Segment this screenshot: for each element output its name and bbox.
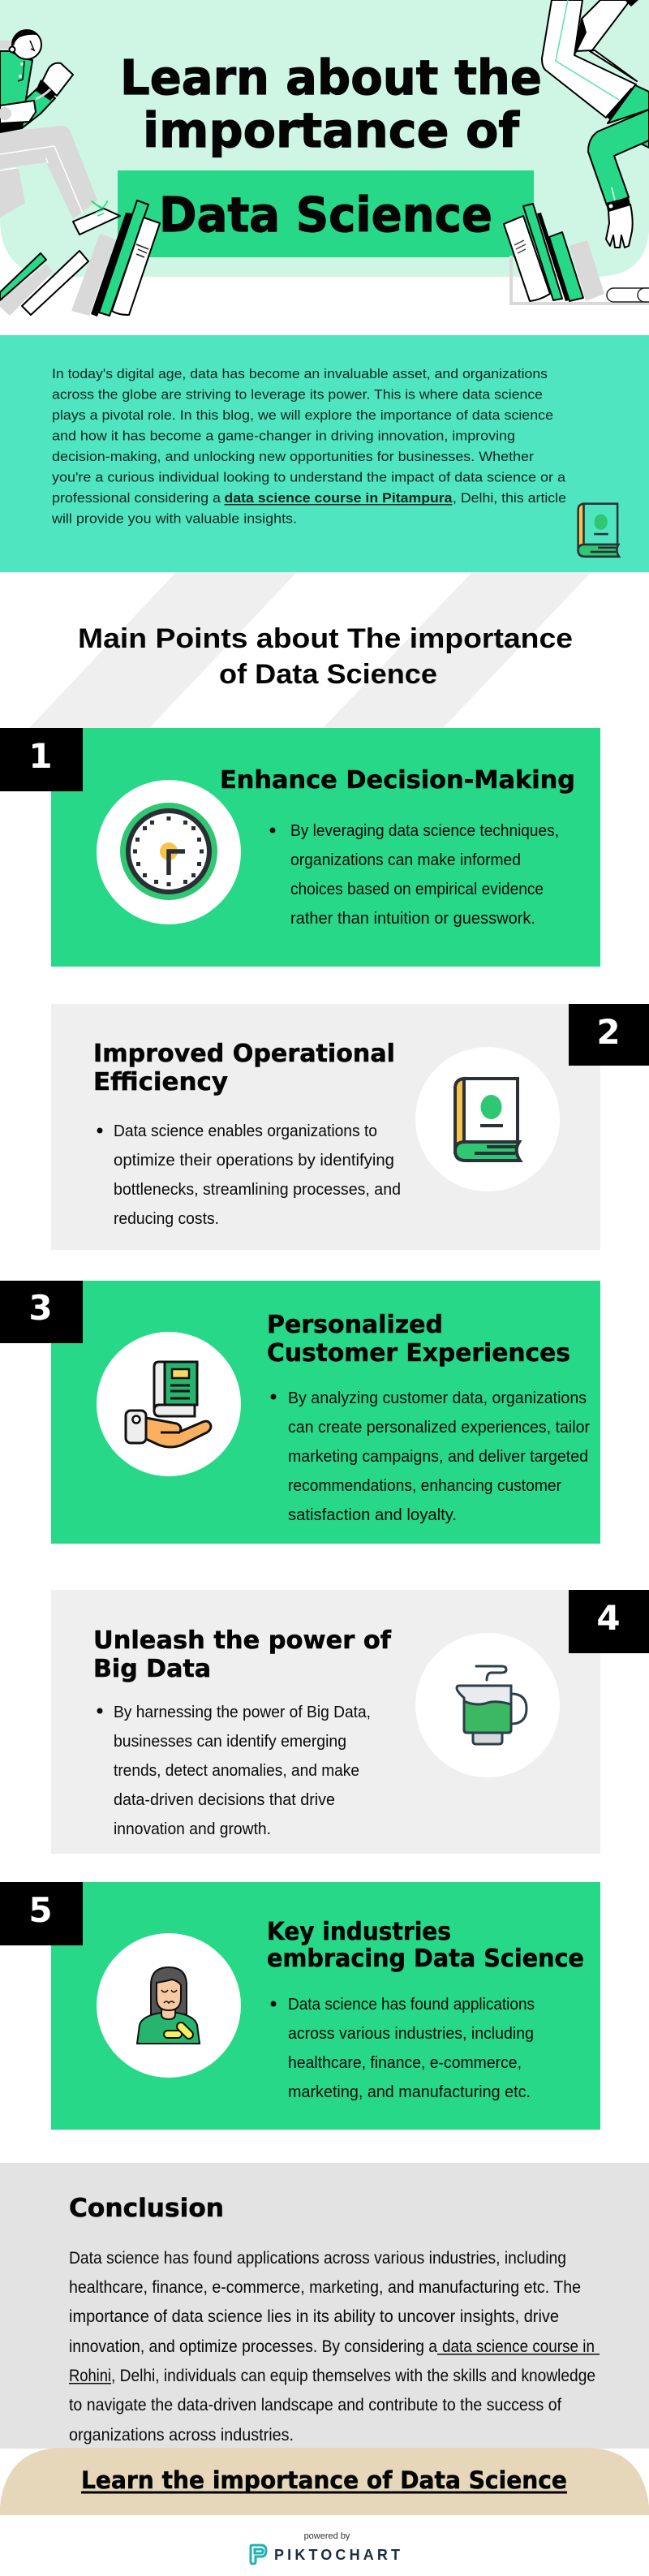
heading: main points: Main Points about The importance [78, 623, 573, 654]
icon: small book [578, 504, 619, 557]
text: point 5: healthcare, finance, e-commerce, [288, 2053, 522, 2072]
number badge 1 [0, 728, 83, 791]
text: point 1: organizations can make informed [290, 851, 521, 869]
call to action banner [0, 2448, 649, 2515]
text: point 3 [271, 1389, 590, 1524]
footer: powered by Piktochart: powered by [304, 2531, 350, 2541]
number badge 2: 2 [596, 1012, 621, 1052]
text block: introduction: In today's digital age, data has become an invaluable asset, and organizations [52, 366, 548, 381]
footer: powered by Piktochart: PIKTOCHART [274, 2547, 400, 2563]
text: point 4: data-driven decisions that drive [114, 1790, 335, 1809]
number badge 3 [0, 1281, 83, 1343]
text block: introduction: decision-making, and unlocking new opportunities for businesses. Whether [52, 449, 534, 464]
title highlight box [118, 170, 534, 257]
illustration: running person left [0, 30, 97, 219]
text block: introduction: data science course in Pitampura [224, 490, 453, 506]
illustration: falling books left [0, 200, 160, 317]
text: point 1: rather than intuition or guesswork. [290, 909, 535, 928]
text block: introduction: across the globe are striving to leverage its power. This is where data science [52, 386, 543, 403]
text: conclusion [69, 2249, 600, 2445]
number badge 4 [569, 1590, 649, 1653]
call to action banner: Learn the importance of Data Science [81, 2466, 567, 2494]
text: point 1: By leveraging data science techniques, [290, 821, 559, 840]
title: importance of [143, 102, 520, 158]
heading: point 5 [267, 1918, 584, 1973]
text: conclusion: , Delhi, individuals can equip themselves with the skills and knowledge [111, 2367, 595, 2385]
text: point 2: Data science enables organizations to [114, 1122, 377, 1140]
text block: introduction: and how it has become a game-changer in driving innovation, improving [52, 429, 515, 443]
panel: conclusion [0, 2163, 649, 2449]
number badge 1: 1 [28, 736, 53, 776]
text: point 1 [269, 821, 559, 928]
icon: Piktochart logo [251, 2545, 266, 2564]
text: point 4: businesses can identify emerging [114, 1732, 346, 1751]
heading: point 4: Unleash the power of [93, 1626, 392, 1655]
text: point 4 [97, 1703, 371, 1838]
text: point 5: Data science has found applications [288, 1995, 535, 2014]
text: conclusion: innovation, and optimize processes. By considering a [69, 2337, 437, 2356]
text: point 1: choices based on empirical evidence [290, 880, 544, 898]
title: Learn about the [120, 50, 542, 106]
number badge 4: 4 [596, 1598, 621, 1638]
footer: powered by Piktochart [251, 2531, 400, 2564]
icon: woman with pills [97, 1933, 241, 2078]
text: conclusion: data science course in [442, 2337, 595, 2356]
panel: point 5 [0, 1882, 600, 2130]
panel: point 1 [0, 728, 600, 967]
heading: main points [78, 623, 573, 690]
title [120, 50, 542, 243]
icon: hand holding book [97, 1332, 241, 1476]
heading: point 3: Personalized [267, 1311, 443, 1339]
heading: point 2: Efficiency [93, 1068, 228, 1096]
text block: introduction: will provide you with valuable insights. [51, 511, 297, 526]
panel: introduction [0, 335, 649, 572]
header panel [0, 0, 649, 317]
text: point 3: marketing campaigns, and deliver targeted [288, 1447, 588, 1466]
text: point 5: marketing, and manufacturing etc. [288, 2083, 531, 2101]
heading: point 1: Enhance Decision-Making [220, 766, 575, 795]
panel: point 2 [51, 1004, 649, 1250]
text: conclusion: Data science has found applications across various industries, including [69, 2249, 566, 2268]
panel: point 3 [0, 1281, 600, 1544]
text: conclusion: importance of data science lies in its ability to uncover insights, drive [69, 2307, 559, 2326]
heading: point 3 [267, 1311, 570, 1368]
heading: point 3: Customer Experiences [267, 1339, 570, 1368]
text: point 3: can create personalized experiences, tailor [288, 1418, 590, 1437]
heading: point 5: Key industries [267, 1918, 451, 1946]
illustration: falling person right [542, 0, 649, 248]
text: point 5: across various industries, including [288, 2024, 534, 2043]
number badge 5 [0, 1882, 83, 1945]
heading: point 4: Big Data [93, 1655, 211, 1683]
text: point 4: trends, detect anomalies, and make [114, 1761, 359, 1780]
title: Data Science [159, 187, 492, 243]
text: point 5 [271, 1995, 535, 2101]
text: point 2 [97, 1122, 401, 1228]
text: point 3: satisfaction and loyalty. [288, 1506, 457, 1524]
text: point 2: reducing costs. [114, 1209, 219, 1228]
text: conclusion: organizations across industries. [69, 2426, 294, 2445]
text: conclusion: to navigate the data-driven landscape and contribute to the success of [69, 2396, 561, 2414]
panel: point 4 [51, 1590, 649, 1854]
text block: introduction: , Delhi, this article [453, 490, 566, 506]
heading: point 2 [93, 1040, 395, 1096]
text block: introduction: you're a curious individual looking to understand the impact of data science or a [52, 469, 566, 485]
text: conclusion: Rohini [69, 2367, 111, 2385]
text block: introduction: plays a pivotal role. In this blog, we will explore the importance of data science [52, 407, 553, 423]
heading: conclusion: Conclusion [69, 2194, 224, 2223]
heading: point 5: embracing Data Science [267, 1945, 584, 1973]
text: point 4: innovation and growth. [114, 1820, 271, 1838]
text: point 2: optimize their operations by identifying [114, 1151, 394, 1170]
number badge 2 [569, 1004, 649, 1066]
number badge 3: 3 [28, 1288, 53, 1328]
heading: point 4 [93, 1626, 392, 1683]
text: point 3: recommendations, enhancing customer [288, 1476, 561, 1495]
text: point 3: By analyzing customer data, organizations [288, 1389, 587, 1407]
icon: jug [415, 1633, 560, 1777]
text: point 4: By harnessing the power of Big Data, [114, 1703, 371, 1721]
heading: main points: of Data Science [219, 659, 437, 690]
illustration: book stack right [504, 204, 649, 305]
text block: introduction: professional considering a [52, 490, 221, 506]
text: point 2: bottlenecks, streamlining processes, and [114, 1180, 401, 1199]
text block: introduction [51, 366, 566, 526]
icon: clock [97, 780, 241, 924]
text: conclusion: healthcare, finance, e-commerce, marketing, and manufacturing etc. The [69, 2278, 581, 2297]
icon: book [415, 1047, 560, 1191]
heading: point 2: Improved Operational [93, 1040, 395, 1068]
number badge 5: 5 [28, 1890, 53, 1930]
